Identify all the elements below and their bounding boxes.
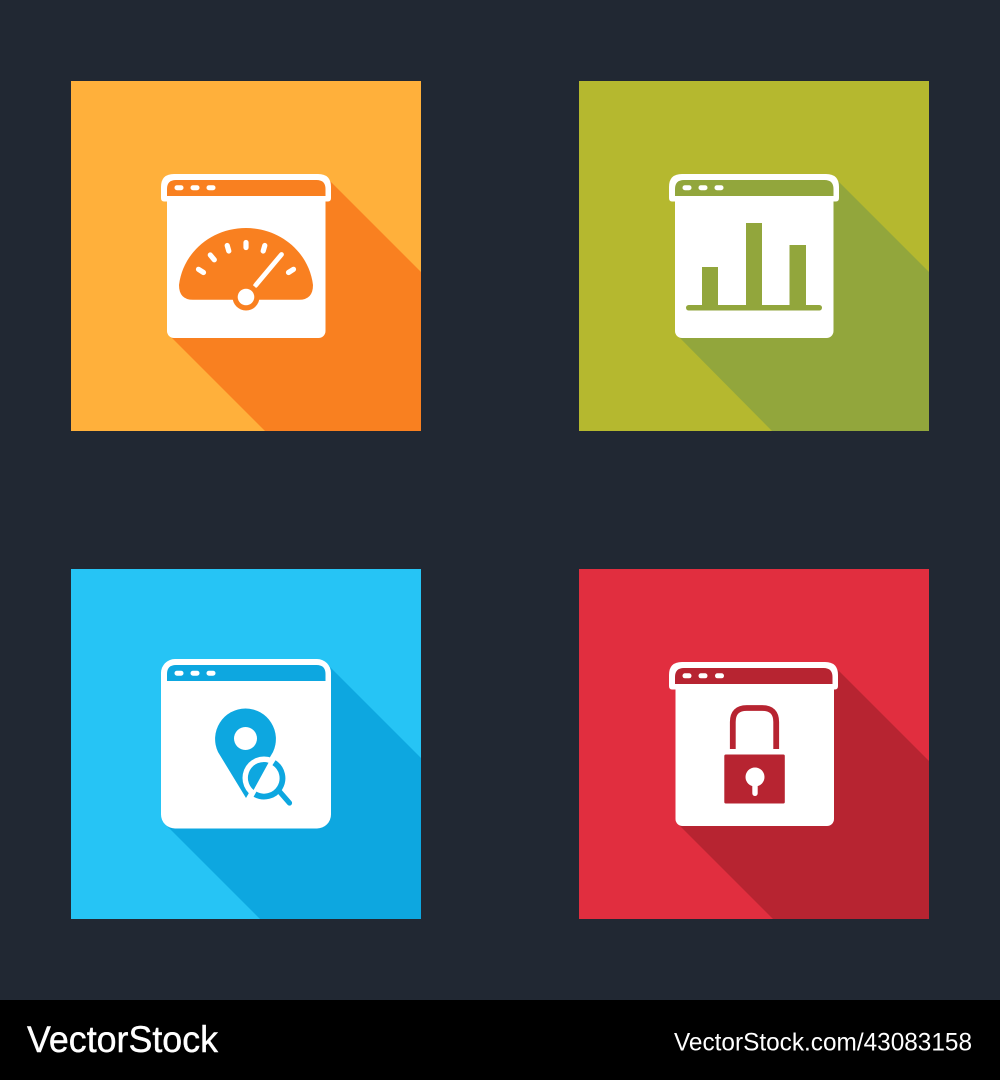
icon: browser window with gauge bbox=[161, 174, 331, 338]
footer bar bbox=[0, 1000, 1000, 1080]
logo wordmark: VectorStock bbox=[27, 1019, 218, 1060]
image id link: VectorStock.com/43083158 bbox=[674, 1028, 972, 1056]
long shadow: blue bbox=[167, 666, 421, 919]
long shadow: dark red bbox=[676, 669, 929, 919]
long shadow: orange bbox=[167, 180, 421, 431]
icon: browser window with bar chart bbox=[669, 174, 839, 338]
icon: browser window with map pin and magnifier bbox=[161, 659, 331, 828]
panel: speedometer browser bbox=[71, 81, 421, 431]
icon: browser window with padlock bbox=[669, 662, 838, 826]
panel: padlock browser bbox=[579, 569, 929, 919]
long shadow: olive bbox=[675, 180, 929, 431]
panel: location search browser bbox=[71, 569, 421, 919]
panel: bar chart browser bbox=[579, 81, 929, 431]
